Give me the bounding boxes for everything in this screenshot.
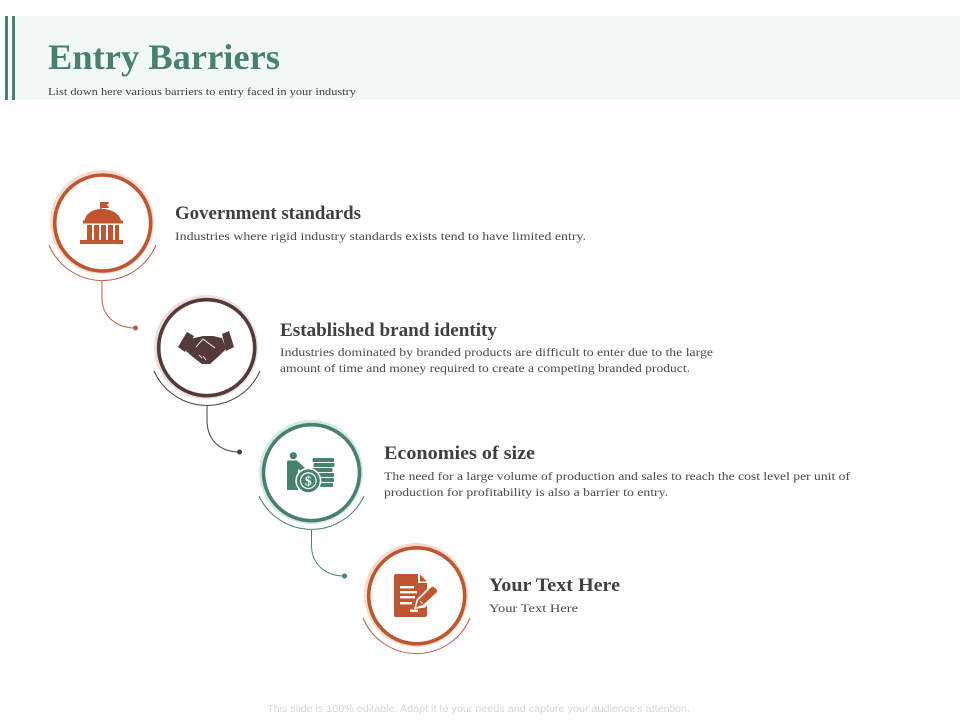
text 4: Your Text Here xyxy=(489,603,578,615)
text 2: Industries dominated by branded products are difficult to enter due to the large xyxy=(280,347,713,359)
circle 1 xyxy=(49,170,156,281)
subtitle: List down here various barriers to entry faced in your industry xyxy=(48,87,357,98)
icon: person with coins xyxy=(287,452,334,494)
heading 3: Economies of size xyxy=(384,444,535,464)
text 3 xyxy=(384,471,850,499)
connector 2 xyxy=(207,405,242,454)
step 3: economies of size xyxy=(259,420,850,578)
connector 3 xyxy=(312,530,347,578)
text 2: amount of time and money required to create a competing branded product. xyxy=(280,363,690,375)
icon: handshake xyxy=(178,331,234,364)
icon: person with coins: $ xyxy=(305,474,312,488)
icon: government building xyxy=(80,202,123,244)
circle 4 xyxy=(363,543,470,654)
text 3: production for profitability is also a barrier to entry. xyxy=(384,487,668,499)
step 1: government standards xyxy=(49,170,586,330)
header band xyxy=(5,16,960,100)
text 3: The need for a large volume of production and sales to reach the cost level per unit of xyxy=(384,471,850,483)
heading 1: Government standards xyxy=(175,204,361,224)
icon: document with pencil xyxy=(394,574,437,617)
text 1: Industries where rigid industry standards exists tend to have limited entry. xyxy=(175,231,586,243)
circle 2 xyxy=(154,295,260,405)
text 2 xyxy=(280,347,713,375)
title: Entry Barriers xyxy=(48,37,280,77)
step 4: your text here xyxy=(363,543,620,654)
heading 4: Your Text Here xyxy=(489,576,620,596)
step 2: established brand identity xyxy=(154,295,713,454)
circle 3 xyxy=(259,420,364,529)
connector 1 xyxy=(102,281,138,330)
heading 2: Established brand identity xyxy=(280,321,498,341)
footer note: This slide is 100% editable. Adapt it to your needs and capture your audience's attention. xyxy=(267,704,690,715)
